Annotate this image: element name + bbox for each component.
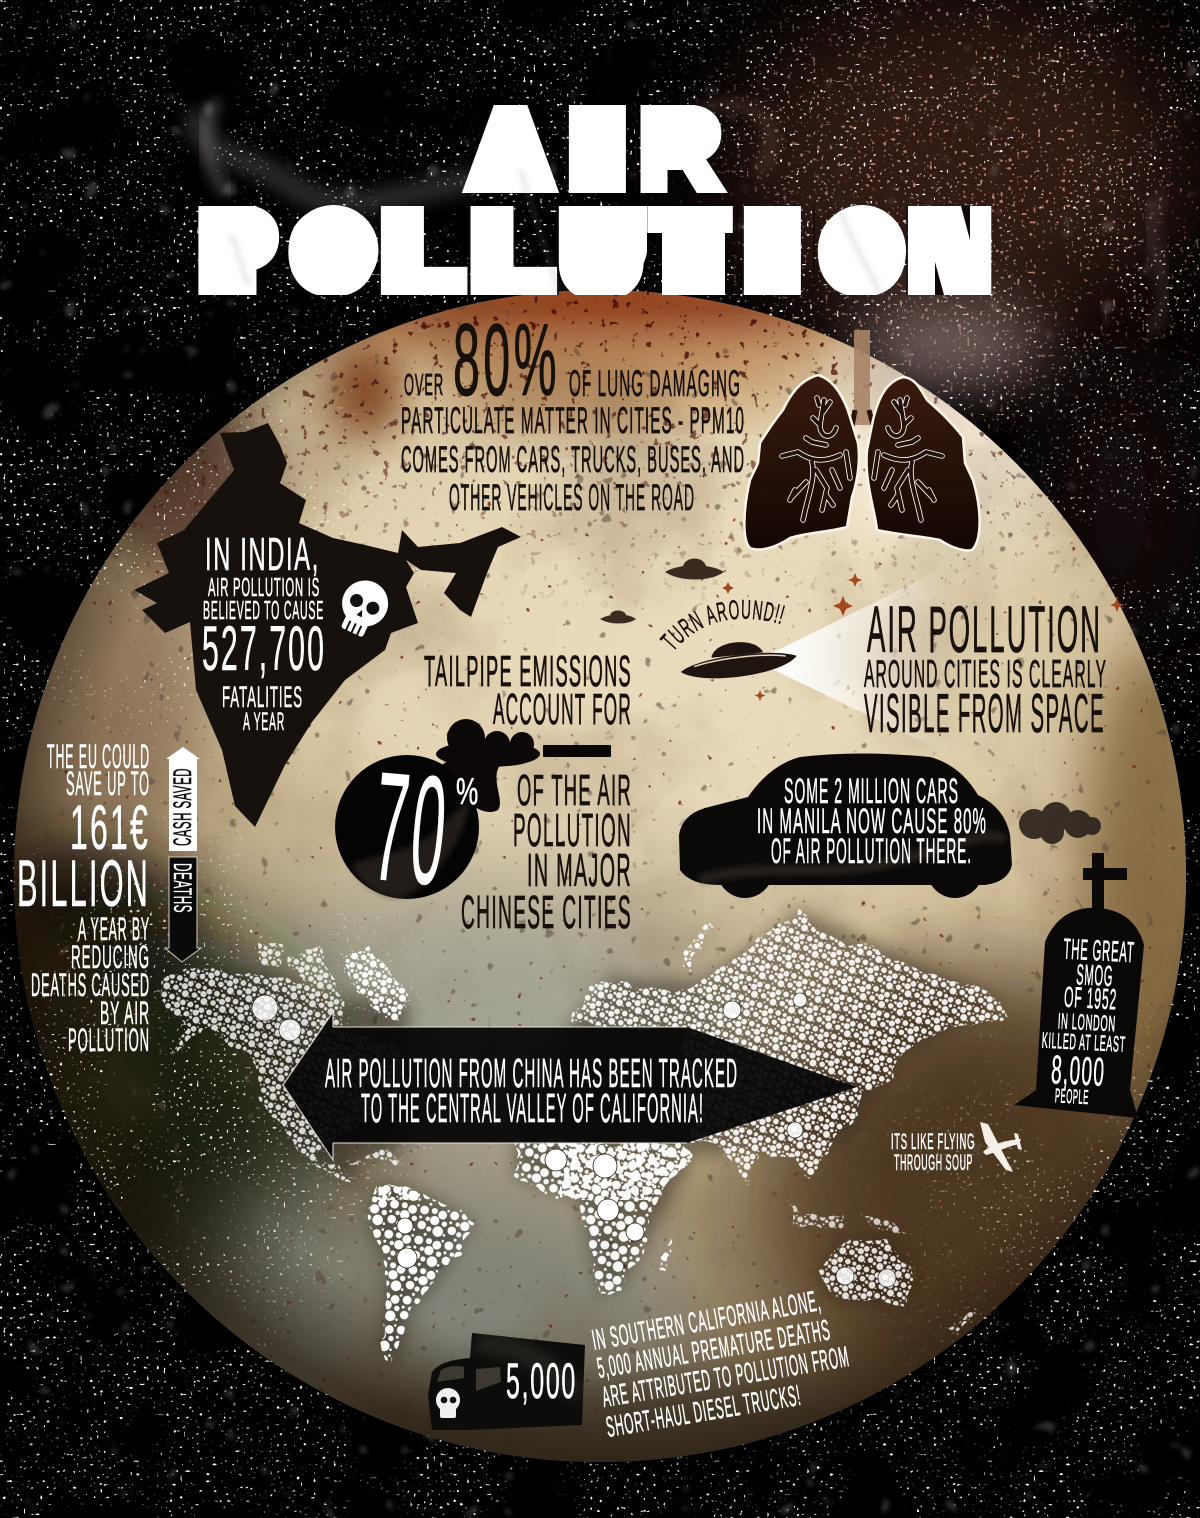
text: tailpipe emissions — [424, 647, 632, 938]
arrow banner: China to California — [283, 1012, 857, 1160]
text: TAILPIPE EMISSIONS — [424, 647, 632, 696]
icon: skull — [330, 573, 396, 643]
text: 80% particulate matter — [401, 303, 745, 518]
text: India fatalities: IN INDIA, — [205, 528, 320, 580]
text: flying through soup — [891, 1129, 975, 1175]
title line 2: O — [286, 187, 378, 319]
text: SAVE UP TO — [66, 765, 150, 803]
map of India: AIR POLLUTION IS — [208, 572, 320, 602]
text: IN SOUTHERN CALIFORNIA ALONE, — [590, 1285, 824, 1357]
big dots — [252, 993, 896, 1287]
arrow up: cash saved — [166, 747, 200, 851]
title: AIR POLLUTION — [198, 105, 992, 295]
lung bronchi — [782, 398, 942, 520]
title line 2: P — [198, 187, 276, 319]
text: India fatalities: FATALITIES — [222, 681, 303, 714]
light beam — [770, 560, 960, 760]
arrow up: cash saved: CASH SAVED — [169, 768, 197, 846]
text: THE EU COULD — [47, 738, 150, 776]
text: India fatalities — [202, 528, 326, 736]
car exhaust smoke — [1019, 802, 1101, 844]
icon: main UFO — [678, 636, 798, 683]
text: visible from space — [864, 592, 1107, 744]
arrow down: deaths: DEATHS — [168, 863, 196, 913]
text: EU could save — [17, 738, 150, 1058]
text: BILLION — [17, 846, 150, 920]
title line 2: U — [559, 187, 644, 319]
text: DEATHS CAUSED — [31, 967, 150, 1003]
text: BY AIR — [100, 995, 150, 1031]
tombstone: great smog: PEOPLE — [1054, 1085, 1089, 1109]
orange stars — [722, 573, 1124, 701]
text: ITS LIKE FLYING — [891, 1129, 975, 1154]
truck with 5,000 — [428, 1333, 585, 1430]
icon: lungs — [744, 330, 980, 551]
map of India: BELIEVED TO CAUSE — [203, 595, 324, 625]
text: turn around: TURN AROUND!! — [659, 600, 785, 650]
world map of dots — [150, 900, 1020, 1375]
tombstone: great smog: OF 1952 — [1063, 982, 1118, 1016]
text: 5,000 ANNUAL PREMATURE DEATHS — [595, 1314, 833, 1385]
smoke cloud — [436, 719, 540, 812]
text: 80% particulate matter: OVER — [404, 367, 444, 402]
text: IN MAJOR — [527, 844, 632, 896]
tombstone: great smog: IN LONDON — [1057, 1008, 1116, 1036]
text: southern California diesel trucks — [590, 1285, 852, 1444]
Indonesia, Papua and New Zealand — [787, 1200, 978, 1334]
title line 1: I — [581, 85, 614, 217]
title line 2: O — [816, 187, 908, 319]
title line 2: T — [654, 187, 726, 319]
text: OF LUNG DAMAGING — [569, 363, 741, 404]
small UFOs — [600, 558, 724, 624]
North America — [150, 930, 420, 1200]
title line 2: N — [907, 187, 992, 319]
text: OTHER VEHICLES ON THE ROAD — [449, 477, 695, 518]
Africa — [514, 1130, 703, 1295]
arrow down: deaths — [165, 857, 201, 962]
text: REDUCING — [71, 939, 150, 975]
exhaust pipe and smoke with 70%: 70 — [367, 739, 457, 918]
icon: airplane — [980, 1122, 1022, 1172]
text: 80% particulate matter: 80% — [453, 303, 560, 417]
car: Manila — [679, 754, 1012, 898]
title line 1: A — [468, 85, 553, 217]
icon: truck skull — [436, 1388, 460, 1418]
tombstone: great smog: 8,000 — [1050, 1048, 1106, 1095]
title line 2: L — [386, 187, 458, 319]
South America — [368, 1184, 474, 1363]
map of India — [134, 423, 521, 827]
title counter fills — [198, 115, 988, 295]
mauve smoke over planet edge — [855, 303, 1045, 387]
text: OF THE AIR — [517, 766, 632, 815]
continent shadow — [165, 910, 1000, 1363]
map of India: 527,700 — [202, 614, 326, 684]
truck with 5,000: 5,000 — [506, 1353, 577, 1409]
title line 1: R — [638, 85, 723, 217]
planet earth — [14, 290, 1186, 1462]
exhaust pipe and smoke with 70% — [335, 719, 611, 918]
exhaust pipe and smoke with 70%: % — [456, 771, 480, 813]
text: India fatalities: A YEAR — [243, 708, 285, 736]
text: CHINESE CITIES — [461, 886, 632, 938]
text: POLLUTION — [513, 804, 632, 856]
Europe and Asia — [560, 900, 1020, 1200]
tombstone: great smog — [1014, 853, 1144, 1118]
smoke wisps — [196, 105, 1164, 330]
text: A YEAR BY — [78, 911, 150, 947]
tombstone: great smog: SMOG — [1075, 959, 1114, 993]
title line 2: I — [756, 187, 789, 319]
text: EU could save: 161€ — [70, 793, 150, 863]
title line 2: L — [476, 187, 548, 319]
text: ACCOUNT FOR — [493, 685, 632, 734]
title smudges — [230, 170, 880, 295]
text: POLLUTION — [68, 1022, 150, 1058]
text: THROUGH SOUP — [894, 1150, 973, 1175]
text: southern California diesel trucks: SHORT-HAUL DIESEL TRUCKS! — [604, 1380, 803, 1444]
